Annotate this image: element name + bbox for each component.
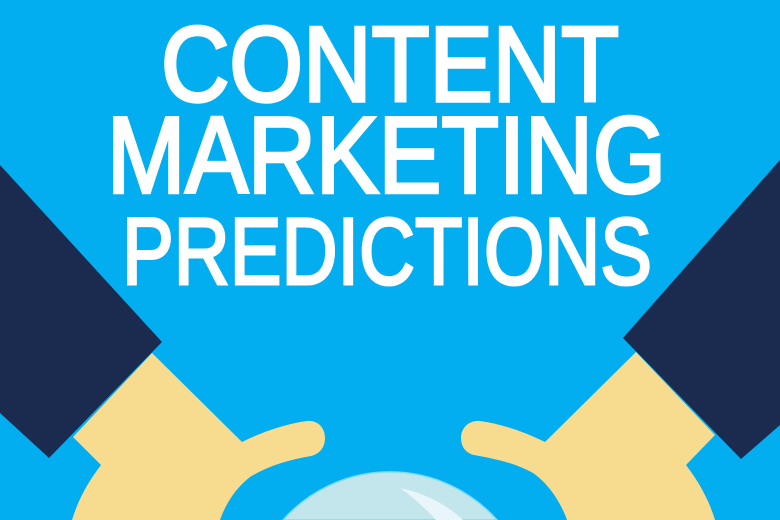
title	[107, 4, 666, 305]
crystal ball highlight	[400, 488, 463, 520]
right sleeve	[623, 160, 780, 459]
title line: CONTENT: CONTENT	[161, 4, 619, 124]
left sleeve	[0, 165, 162, 458]
crystal ball	[283, 472, 497, 520]
right hand palm and thumb	[461, 352, 715, 520]
left hand palm and thumb	[72, 353, 325, 520]
title line: MARKETING: MARKETING	[107, 94, 666, 216]
title line: PREDICTIONS: PREDICTIONS	[122, 199, 652, 305]
right hand	[461, 160, 780, 520]
left hand	[0, 165, 325, 520]
